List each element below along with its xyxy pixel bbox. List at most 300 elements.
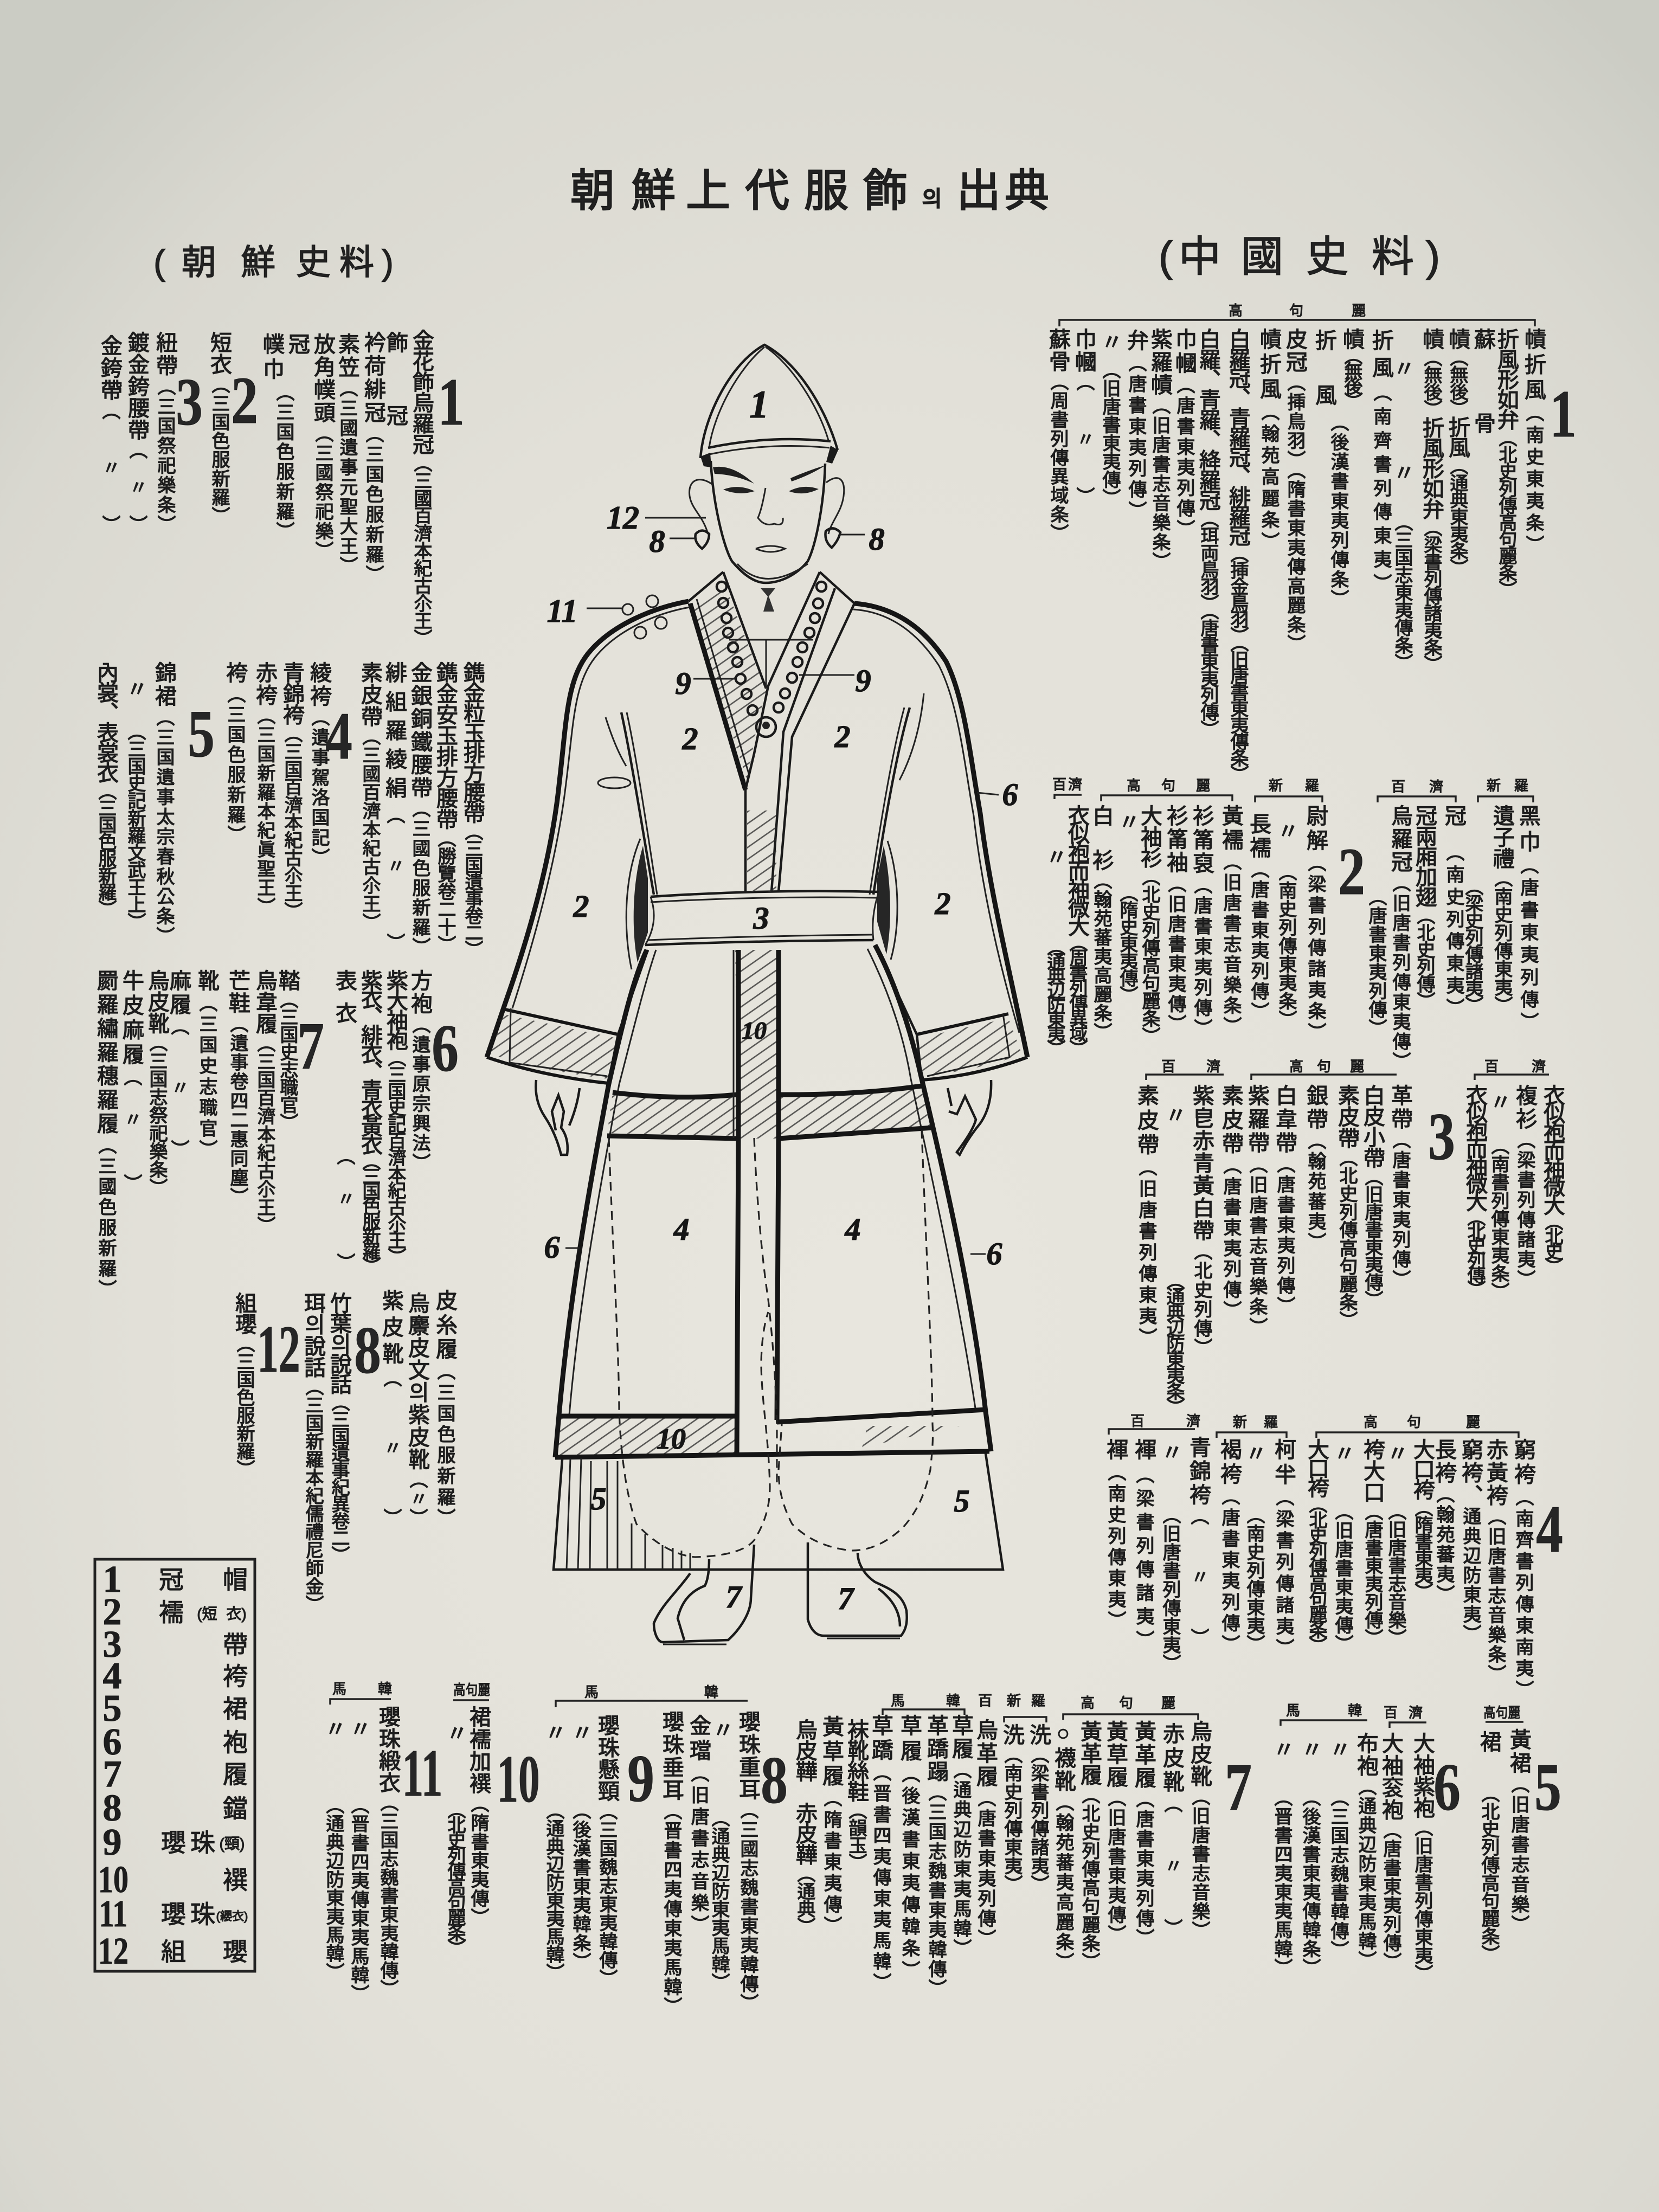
state labels and brackets: 馬	[1286, 1702, 1300, 1719]
figure number labels: 12	[607, 500, 639, 536]
legend numbers: 3	[103, 1624, 121, 1666]
columns for item 12: 竹葉의說話（三国遺事紀異卷二）	[327, 1292, 351, 1564]
columns for item 3: 複衫 （梁書列傳諸夷）	[1513, 1084, 1537, 1288]
columns for item 11	[321, 1706, 400, 2003]
number 1: 1	[438, 365, 465, 440]
legend garment names: 珠	[190, 1900, 215, 1928]
columns for item 4: 〃	[1330, 1442, 1354, 1464]
icon: coat front and skirt	[555, 811, 991, 1457]
columns for item 4: 青錦袴 （ 〃 ）	[1186, 1436, 1211, 1647]
columns for item 3: 衣似袍而袖微大（北史列傳）	[1463, 1084, 1488, 1298]
columns for item 1: 衿荷緋冠 （三国色服新羅）	[361, 331, 385, 583]
legend numbers: 8	[103, 1787, 121, 1829]
figure number labels: 10	[742, 1017, 767, 1044]
columns for item 3: 〃	[1487, 1091, 1510, 1113]
state labels and bracket	[556, 1684, 748, 1707]
figure number labels: 6	[544, 1230, 560, 1265]
columns for item 2: 烏羅冠 （旧唐書列傳東夷傳）	[1388, 805, 1412, 1070]
columns for item 2: （隋史東夷傳）	[1117, 884, 1138, 1004]
columns for item 3: 白皮小帶 （旧唐書東夷傳）	[1360, 1084, 1385, 1309]
number 8: 8	[354, 1314, 381, 1388]
columns for items 5 and 6: 裙	[1477, 1731, 1501, 1752]
icon: face	[690, 461, 844, 583]
columns for item 7: 草蹻 （晋書四夷傳東夷馬韓）	[869, 1714, 893, 1991]
columns for item 5: 〃	[123, 678, 147, 699]
columns for item 7: 靴 （三国史志職官）	[195, 969, 219, 1158]
number 10: 10	[497, 1741, 540, 1816]
columns for item 1: 冠	[285, 333, 310, 355]
columns for items 5 and 6: 黃裙 （旧唐書志音樂）	[1507, 1728, 1531, 1933]
columns for item 1: （後漢書東夷列傳条）	[1328, 413, 1349, 608]
columns for item 1: （三国色服新羅）	[273, 383, 294, 540]
columns for item 1: 幘（無後）	[1340, 328, 1364, 410]
figure number labels: 6	[987, 1236, 1002, 1271]
columns for item 4: （旧唐書東夷傳）	[1332, 1502, 1353, 1653]
columns for item 7: ○襪靴 （翰苑蕃夷高麗条）	[1051, 1721, 1076, 1971]
columns for item 9: 〃	[542, 1721, 565, 1743]
panel: Chinese sources, item 4	[1103, 1413, 1563, 1699]
columns for item 8: （通典辺防東夷馬韓）	[709, 1809, 730, 1991]
columns for item 3: 金銙帶 （ 〃 ）	[98, 335, 123, 533]
title: 朝鮮上代服飾	[570, 166, 908, 216]
columns for item 6: 表衣	[332, 969, 357, 1024]
columns for item 4: 綾袴 （遺事駕洛国記）	[307, 661, 331, 866]
state labels and brackets	[1146, 1058, 1549, 1080]
columns for item 3: （南書列傳東夷条）	[1488, 1136, 1509, 1301]
state labels and bracket	[1059, 303, 1535, 326]
columns for item 3: 紫羅帶 （旧唐書志音樂条）	[1245, 1084, 1269, 1336]
columns for item 1: 幘（無後）折風（通典東夷条）	[1445, 328, 1470, 577]
columns for item 7: 草履 （通典辺防東夷馬韓）	[949, 1714, 973, 1957]
columns for item 3: 衣似袍而袖微大（北史）	[1540, 1084, 1565, 1276]
legend garment names: 衣)	[226, 1605, 247, 1622]
figure number labels: 8	[650, 524, 665, 559]
columns for item 2: 長襦 （唐書東夷列傳）	[1246, 813, 1271, 1020]
legend garment names	[159, 1566, 248, 1966]
legend garment names: 冠	[159, 1566, 184, 1594]
columns for item 1: 折 風	[1312, 329, 1336, 406]
columns for item 3	[1134, 1084, 1565, 1416]
columns for item 7: 烏皮靴 （旧唐書志音樂）	[1187, 1720, 1212, 1939]
number 11: 11	[402, 1735, 442, 1810]
legend garment names: 袴	[223, 1662, 248, 1690]
columns for item 4: （旧唐書志音樂）	[1385, 1502, 1406, 1647]
columns for item 7: 洗 （南史列傳東夷）	[1000, 1724, 1024, 1893]
number 9: 9	[627, 1742, 654, 1816]
columns for item 4: 褐袴 （唐書東夷列傳）	[1217, 1438, 1242, 1653]
columns for item 1: 幘折風 （南史東夷条）	[1521, 328, 1546, 554]
icon: belt	[645, 891, 879, 945]
columns for item 7: 赤皮靴 （ 〃 ）	[1160, 1722, 1184, 1937]
columns for item 11: 〃	[321, 1718, 345, 1739]
legend garment names: 履	[223, 1760, 248, 1789]
columns for item 1: 折風 （南齊書列傳東夷）	[1369, 329, 1393, 592]
columns for item 2: 衫筩裒 （唐書東夷列傳）	[1189, 805, 1214, 1037]
columns for item 1: 蘇 骨	[1471, 328, 1495, 434]
columns for item 5: （三国史記新羅文武王上）	[125, 722, 146, 931]
state labels and brackets: 百	[1484, 1058, 1499, 1075]
columns for item 4: 窮袴、 通典辺防東夷）	[1458, 1438, 1483, 1643]
columns for item 3: 素皮帶 （旧唐書列傳東夷）	[1134, 1084, 1159, 1346]
columns for item 2: 黑巾 （唐書東夷列傳）	[1516, 805, 1540, 1031]
icon: dashed trousers	[609, 1130, 933, 1557]
columns for item 9	[542, 1714, 619, 1988]
state labels and brackets: 句	[1317, 1058, 1331, 1075]
icon: necklace of beads and pendant	[717, 582, 826, 737]
state labels and brackets: 高	[1127, 777, 1141, 794]
panel: Chinese sources, items 5 and 6	[1270, 1702, 1561, 1983]
columns for item 5: 內裳、表裳衣（三国色服新羅）	[94, 661, 118, 918]
state labels and bracket: 新	[1007, 1693, 1021, 1709]
columns for item 3	[98, 331, 178, 533]
state labels and bracket: 馬	[332, 1681, 346, 1697]
figure number labels: 4	[845, 1212, 861, 1247]
state labels and brackets: 濟	[1429, 779, 1443, 795]
columns for item 8: 瓔珠重耳 （三國志魏書東夷韓傳）	[736, 1711, 760, 2012]
columns for item 4: （南史列傳東夷）	[1244, 1506, 1265, 1653]
legend frame	[95, 1559, 255, 1971]
columns for item 7: 黃革履 （唐書東夷列傳）	[1131, 1720, 1156, 1947]
columns for item 12: 珥의說話 （三国新羅本紀儒禮尼師金）	[301, 1292, 325, 1613]
columns for items 5 and 6	[1270, 1728, 1531, 1983]
columns for items 5 and 6: 〃	[1326, 1738, 1350, 1760]
columns for item 4: 〃	[1158, 1441, 1182, 1463]
columns for item 1: 折風形如弁（北史列傳高句麗条）	[1494, 328, 1519, 599]
state labels and brackets	[1109, 1413, 1519, 1438]
panel: Korean sources, items 4 and 5	[94, 661, 485, 959]
columns for item 1	[1046, 328, 1546, 783]
legend numbers: 9	[103, 1822, 121, 1863]
state labels and brackets: 百	[1052, 776, 1066, 793]
columns for item 10	[443, 1706, 491, 1957]
legend garment names: (短	[197, 1605, 217, 1622]
legend garment names: 瓔	[223, 1938, 248, 1966]
columns for item 7: 黃草履 （旧唐書東夷傳）	[1103, 1720, 1128, 1943]
legend garment names: 珠	[190, 1829, 215, 1857]
state labels and bracket: 韓	[946, 1693, 960, 1709]
figure number labels: 2	[682, 721, 698, 756]
legend garment names: 帽	[223, 1566, 248, 1594]
columns for item 2: 大袖衫 （北史列傳高句麗条）	[1137, 805, 1162, 1045]
figure number labels: 3	[753, 901, 769, 936]
columns for item 1: 素笠 （三國遺事元聖大王）	[335, 333, 359, 575]
columns for item 3: 鍍金銙腰帶 （ 〃 ）	[125, 331, 150, 533]
columns for item 7: 烏韋履 （三国百濟本紀古尒王）	[253, 969, 277, 1234]
state labels and brackets: 羅	[1514, 777, 1528, 794]
panel: Chinese sources, item 2	[1043, 776, 1540, 1070]
columns for item 3: 素皮帶 （唐書東夷列傳）	[1219, 1084, 1243, 1319]
columns for item 4: 鐫金安玉排方腰帶 （勝覽卷二十）	[433, 661, 458, 954]
legend numbers: 2	[103, 1591, 121, 1633]
heading: Korean sources: (朝鮮史料)	[153, 243, 394, 282]
columns for item 12	[232, 1292, 351, 1613]
number 4: 4	[325, 699, 352, 774]
columns for item 6: （ 〃 ）	[334, 1147, 355, 1271]
state labels and brackets: 新	[1269, 777, 1283, 794]
state labels and brackets: 百	[1161, 1058, 1175, 1075]
columns for item 8: 皮糸履 （三国色服新羅）	[433, 1289, 457, 1527]
columns for item 7	[793, 1714, 1212, 1997]
legend numbers: 6	[103, 1721, 121, 1763]
panel: Chinese sources, item 10	[443, 1682, 540, 1957]
legend garment names: 瓔	[161, 1829, 186, 1857]
columns for items 5 and 6: （北史列傳高句麗条）	[1478, 1784, 1500, 1963]
columns for item 4: 褌 （梁書列傳諸夷）	[1131, 1438, 1156, 1649]
columns for item 1: 〃	[1390, 461, 1414, 483]
columns for items 5 and 6: （三国志魏書韓傳）	[1328, 1788, 1349, 1959]
columns for item 7: 革蹻蹋 （三国志魏書東夷韓傳）	[924, 1714, 948, 1997]
state label and bracket: 高句麗	[453, 1682, 490, 1698]
columns for item 7: 芒鞋 （遺事卷四二惠同塵）	[226, 969, 250, 1206]
state labels and bracket: 馬	[584, 1684, 599, 1700]
columns for item 7: 袜靴絲鞋 （韻玉）	[844, 1719, 869, 1872]
state labels and brackets: 新	[1487, 777, 1501, 794]
columns for item 2: 白 衫 （翰苑蕃夷高麗条）	[1089, 805, 1114, 1041]
state labels and brackets: 羅	[1305, 777, 1319, 794]
columns for item 8: 瓔珠垂耳 （晋書四夷傳東夷馬韓）	[659, 1711, 684, 2015]
columns for item 1: 白羅冠、青羅冠、緋羅冠（挿金鳥羽）（旧唐書東夷傳条）	[1226, 328, 1250, 783]
columns for item 8: 烏麖皮文의紫皮靴 （〃）	[405, 1292, 429, 1527]
columns for item 11: （通典辺防東夷馬韓）	[323, 1796, 344, 1981]
panel: Chinese sources, item 11	[321, 1681, 442, 2003]
number 3: 3	[1428, 1100, 1455, 1174]
legend garment names: 鐺	[223, 1795, 248, 1823]
columns for item 1: 巾幗 （唐書東夷列傳）	[1172, 328, 1196, 538]
columns for item 2: 冠兩廂加翅（北史列傳）	[1412, 805, 1437, 1010]
columns for item 1: 幘折風 （翰苑高麗条）	[1257, 328, 1281, 550]
figure number labels: 9	[676, 666, 691, 701]
state labels and brackets: 高句麗	[1483, 1705, 1520, 1721]
figure number labels: 5	[591, 1481, 606, 1516]
columns for item 7: 烏革履 （唐書東夷列傳）	[973, 1719, 998, 1947]
number 7: 7	[1225, 1751, 1252, 1825]
state labels and brackets: 麗	[1350, 1058, 1364, 1075]
columns for item 4: 緋組羅綾絹 （ 〃 ）	[382, 661, 407, 951]
panel: Korean sources, items 1 to 3	[98, 329, 465, 647]
legend garment names: 瓔	[161, 1900, 186, 1928]
number 6: 6	[1433, 1751, 1461, 1825]
figure number labels: 1	[749, 383, 769, 426]
state labels and brackets: 百	[1391, 779, 1405, 795]
columns for item 3: 素皮帶 （北史列傳高句麗条）	[1335, 1084, 1359, 1329]
figure number labels: 6	[1002, 777, 1018, 812]
columns for item 1	[260, 329, 434, 647]
legend numbers: 1	[103, 1559, 121, 1600]
columns for item 4	[223, 661, 485, 959]
columns for item 4: 柯半 （梁書列傳諸夷）	[1271, 1438, 1296, 1657]
number 2: 2	[1338, 835, 1365, 909]
columns for item 1: 幞巾	[260, 333, 284, 380]
state labels and bracket: 句	[1289, 303, 1303, 319]
columns for item 4: 褌 （南史列傳東夷）	[1103, 1438, 1128, 1629]
legend garment names: 組	[161, 1938, 186, 1966]
state labels and brackets: 高	[1364, 1414, 1378, 1430]
columns for item 1: 蘇骨 （周書列傳異域条）	[1046, 328, 1070, 542]
columns for item 4: 青錦袴 （三国百濟本紀古尒王）	[280, 661, 305, 920]
state labels and bracket: 高	[1081, 1695, 1095, 1711]
state labels and bracket: 高	[1229, 303, 1243, 319]
number 5: 5	[1534, 1751, 1561, 1825]
columns for item 4: （旧唐書列傳東夷）	[1160, 1506, 1181, 1673]
columns for item 4: 赤袴 （三国新羅本紀眞聖王）	[253, 661, 277, 916]
columns for item 9: 〃	[568, 1721, 592, 1743]
columns for item 1: 巾幗 （ 〃 ）	[1072, 328, 1096, 505]
columns for item 11: （晋書四夷傳東夷馬韓）	[348, 1796, 369, 2003]
columns for item 1: 飾 冠	[383, 331, 408, 426]
columns for item 4: 赤黃袴 （旧唐書志音樂条）	[1483, 1438, 1508, 1683]
columns for item 4: 大口袴（北史列傳高句麗条）	[1304, 1438, 1329, 1655]
columns for item 2: 冠 （南史列傳東夷）	[1442, 805, 1466, 1017]
state labels and bracket: 韓	[704, 1684, 718, 1700]
panel: Chinese sources, item 9	[542, 1714, 654, 1988]
legend numbers: 5	[103, 1688, 121, 1729]
columns for item 7	[94, 969, 300, 1298]
number 5: 5	[188, 697, 215, 771]
columns for item 1: 皮冠 （挿鳥羽）（隋書東夷傳高麗条）	[1283, 328, 1307, 653]
state labels and brackets	[1052, 776, 1533, 802]
columns for item 6: 紫大袖袍（三国史記百濟本紀古尒王）	[383, 969, 408, 1266]
columns for item 2: 衣似袍而袖微大（周書列傳異域）	[1065, 805, 1090, 1058]
columns for item 3: 革帶 （唐書東夷列傳）	[1388, 1084, 1412, 1288]
columns for item 7: 草履 （後漢書東夷傳韓条）	[897, 1714, 922, 1979]
figure number labels: 2	[834, 719, 850, 754]
state labels and brackets: 濟	[1532, 1058, 1546, 1075]
columns for item 9: （通典辺防東夷馬韓）	[543, 1801, 564, 1982]
columns for item 2: 〃	[1274, 820, 1298, 841]
columns for item 1: 〃	[1390, 357, 1414, 379]
columns for item 7: 麻履 （ 〃 ）	[166, 969, 191, 1158]
columns for item 4: 袴 （三国色服新羅）	[223, 661, 247, 844]
panel: Chinese sources, item 1	[1046, 303, 1577, 783]
columns for item 3: 〃	[1162, 1104, 1186, 1126]
legend garment names: 襈	[223, 1866, 248, 1894]
legend numbers: 7	[103, 1753, 121, 1795]
state labels and brackets: 麗	[1466, 1414, 1480, 1430]
columns for item 7: 黃草履 （隋書東夷傳）	[819, 1715, 844, 1934]
columns for item 10: （北史列傳高句麗条）	[445, 1801, 466, 1957]
columns for item 1: 幘（無後）折風形如弁（梁書列傳諸夷条）	[1419, 328, 1444, 673]
state labels and bracket: 韓	[378, 1681, 392, 1697]
columns for item 8: 金璫 （旧唐書志音樂）	[686, 1714, 711, 1933]
columns for item 2: 尉解 （梁書列傳諸夷条）	[1303, 805, 1328, 1041]
state labels and brackets: 濟	[1068, 776, 1082, 793]
legend garment names: (頸)	[220, 1835, 245, 1852]
figure: standing figure in ancient Korean costume	[487, 345, 1027, 1644]
columns for item 7: 洗 （梁書列傳諸夷）	[1026, 1724, 1051, 1893]
legend numbers: 4	[103, 1655, 121, 1697]
columns for items 5 and 6: 大袖衮袍 （唐書東夷列傳）	[1379, 1732, 1404, 1971]
number 7: 7	[297, 1009, 324, 1084]
columns for item 12: 組瓔 （三国色服新羅）	[232, 1292, 257, 1478]
columns for item 5	[94, 661, 177, 945]
columns for item 2: （南史列傳東夷条）	[1276, 863, 1297, 1028]
columns for item 1: 白羅、青羅、絳羅冠（珥両鳥羽）（唐書東夷列傳）	[1196, 328, 1220, 738]
figure number labels: 11	[547, 593, 577, 629]
columns for item 2: 遺子禮 （南史列傳東夷）	[1490, 805, 1514, 1014]
number 8: 8	[761, 1744, 788, 1818]
columns for item 7: 鞜 （三国史志職官）	[275, 969, 300, 1131]
columns for item 2: （唐書東夷列傳）	[1366, 888, 1387, 1037]
columns for item 8	[379, 1289, 457, 1527]
state labels and brackets: 句	[1161, 777, 1175, 794]
panel: Chinese sources, item 7	[793, 1693, 1252, 1997]
figure number labels: 9	[856, 663, 871, 698]
columns for item 3: 白韋帶 （唐書東夷列傳）	[1272, 1084, 1296, 1315]
legend numbers: 11	[99, 1893, 127, 1934]
state labels and brackets: 濟	[1409, 1705, 1423, 1721]
number 1: 1	[1549, 377, 1577, 452]
state labels and bracket: 百	[978, 1693, 992, 1709]
columns for items 5 and 6: 〃	[1298, 1738, 1322, 1760]
state labels and brackets	[1281, 1702, 1523, 1728]
icon: pointed hat	[700, 345, 838, 467]
legend numbers	[98, 1559, 128, 1972]
figure number labels: 4	[673, 1212, 690, 1247]
number 4: 4	[1536, 1493, 1563, 1567]
columns for item 2: 〃	[1043, 846, 1066, 867]
number 3: 3	[176, 365, 203, 440]
heading: Chinese sources: (中國史料)	[1159, 233, 1440, 280]
columns for items 5 and 6: （後漢書東夷傳韓条）	[1300, 1788, 1321, 1977]
columns for items 5 and 6: （晋書四夷東夷馬韓）	[1271, 1788, 1293, 1977]
state labels and brackets: 韓	[1348, 1702, 1362, 1719]
title: 出典	[956, 166, 1049, 216]
icon: shoes	[654, 1542, 907, 1644]
columns for item 7: 黃革履 （北史列傳高句麗条）	[1077, 1720, 1102, 1971]
icon: shoulder beads	[622, 595, 667, 639]
columns for item 7: 罽羅繡羅穗羅履 （三國色服新羅）	[94, 969, 118, 1298]
columns for item 1: 紫羅幘 （旧唐書志音樂条）	[1148, 328, 1172, 570]
panel: Korean sources, items 6 and 7	[94, 969, 459, 1298]
columns for item 8: 紫皮靴 （ 〃 ）	[379, 1289, 403, 1527]
state labels and brackets: 濟	[1186, 1413, 1200, 1429]
columns for items 5 and 6: 大袖紫袍 （旧唐書列傳東夷）	[1410, 1732, 1435, 1983]
columns for item 3: 紐帶 （三国祭祀樂条）	[153, 331, 178, 533]
columns for item 4: 素皮帶 （三國百濟本紀古尒王）	[358, 661, 382, 931]
figure number labels: 10	[657, 1423, 686, 1455]
icon: collar	[689, 564, 854, 892]
columns for item 8	[659, 1711, 760, 2015]
columns for item 6	[332, 969, 432, 1275]
columns for item 10: 〃	[443, 1722, 467, 1744]
columns for item 2: （梁史列傳諸夷）	[1462, 877, 1483, 1014]
columns for items 5 and 6: 〃	[1270, 1738, 1294, 1760]
state labels and brackets: 高	[1289, 1058, 1303, 1075]
columns for item 1: 放角幞頭 （三國祭祀樂）	[311, 333, 336, 560]
columns for item 3: 紫皀赤青黃白帶 （北史列傳）	[1189, 1084, 1214, 1356]
panel: Chinese sources, item 3	[1134, 1058, 1565, 1416]
number 12: 12	[257, 1311, 300, 1386]
columns for item 2: 衫筩袖 （旧唐書東夷傳）	[1163, 805, 1188, 1033]
columns for item 4: 窮袴 （南齊書列傳東南夷）	[1511, 1438, 1535, 1699]
state labels and bracket: 句	[1119, 1695, 1133, 1711]
state labels and brackets: 新	[1233, 1414, 1247, 1430]
state labels and bracket	[330, 1681, 392, 1705]
state labels and bracket: 馬	[891, 1693, 905, 1709]
figure number labels: 7	[725, 1579, 743, 1615]
state labels and brackets: 句	[1407, 1414, 1421, 1430]
columns for item 2	[1043, 805, 1540, 1070]
legend garment names: 裙	[223, 1695, 248, 1723]
columns for items 5 and 6: 布袍 （通典辺防東夷馬韓）	[1354, 1732, 1378, 1969]
icon: hands	[536, 1080, 991, 1155]
columns for item 4: 長袴 （翰苑蕃夷）	[1432, 1438, 1456, 1603]
number 2: 2	[231, 364, 258, 438]
columns for item 1: 金花飾烏羅冠 （三國百濟本紀古尒王）	[409, 329, 434, 647]
columns for item 1: 〃	[1098, 331, 1122, 352]
figure number labels: 2	[573, 889, 589, 924]
columns for item 2: 〃	[1115, 811, 1139, 832]
